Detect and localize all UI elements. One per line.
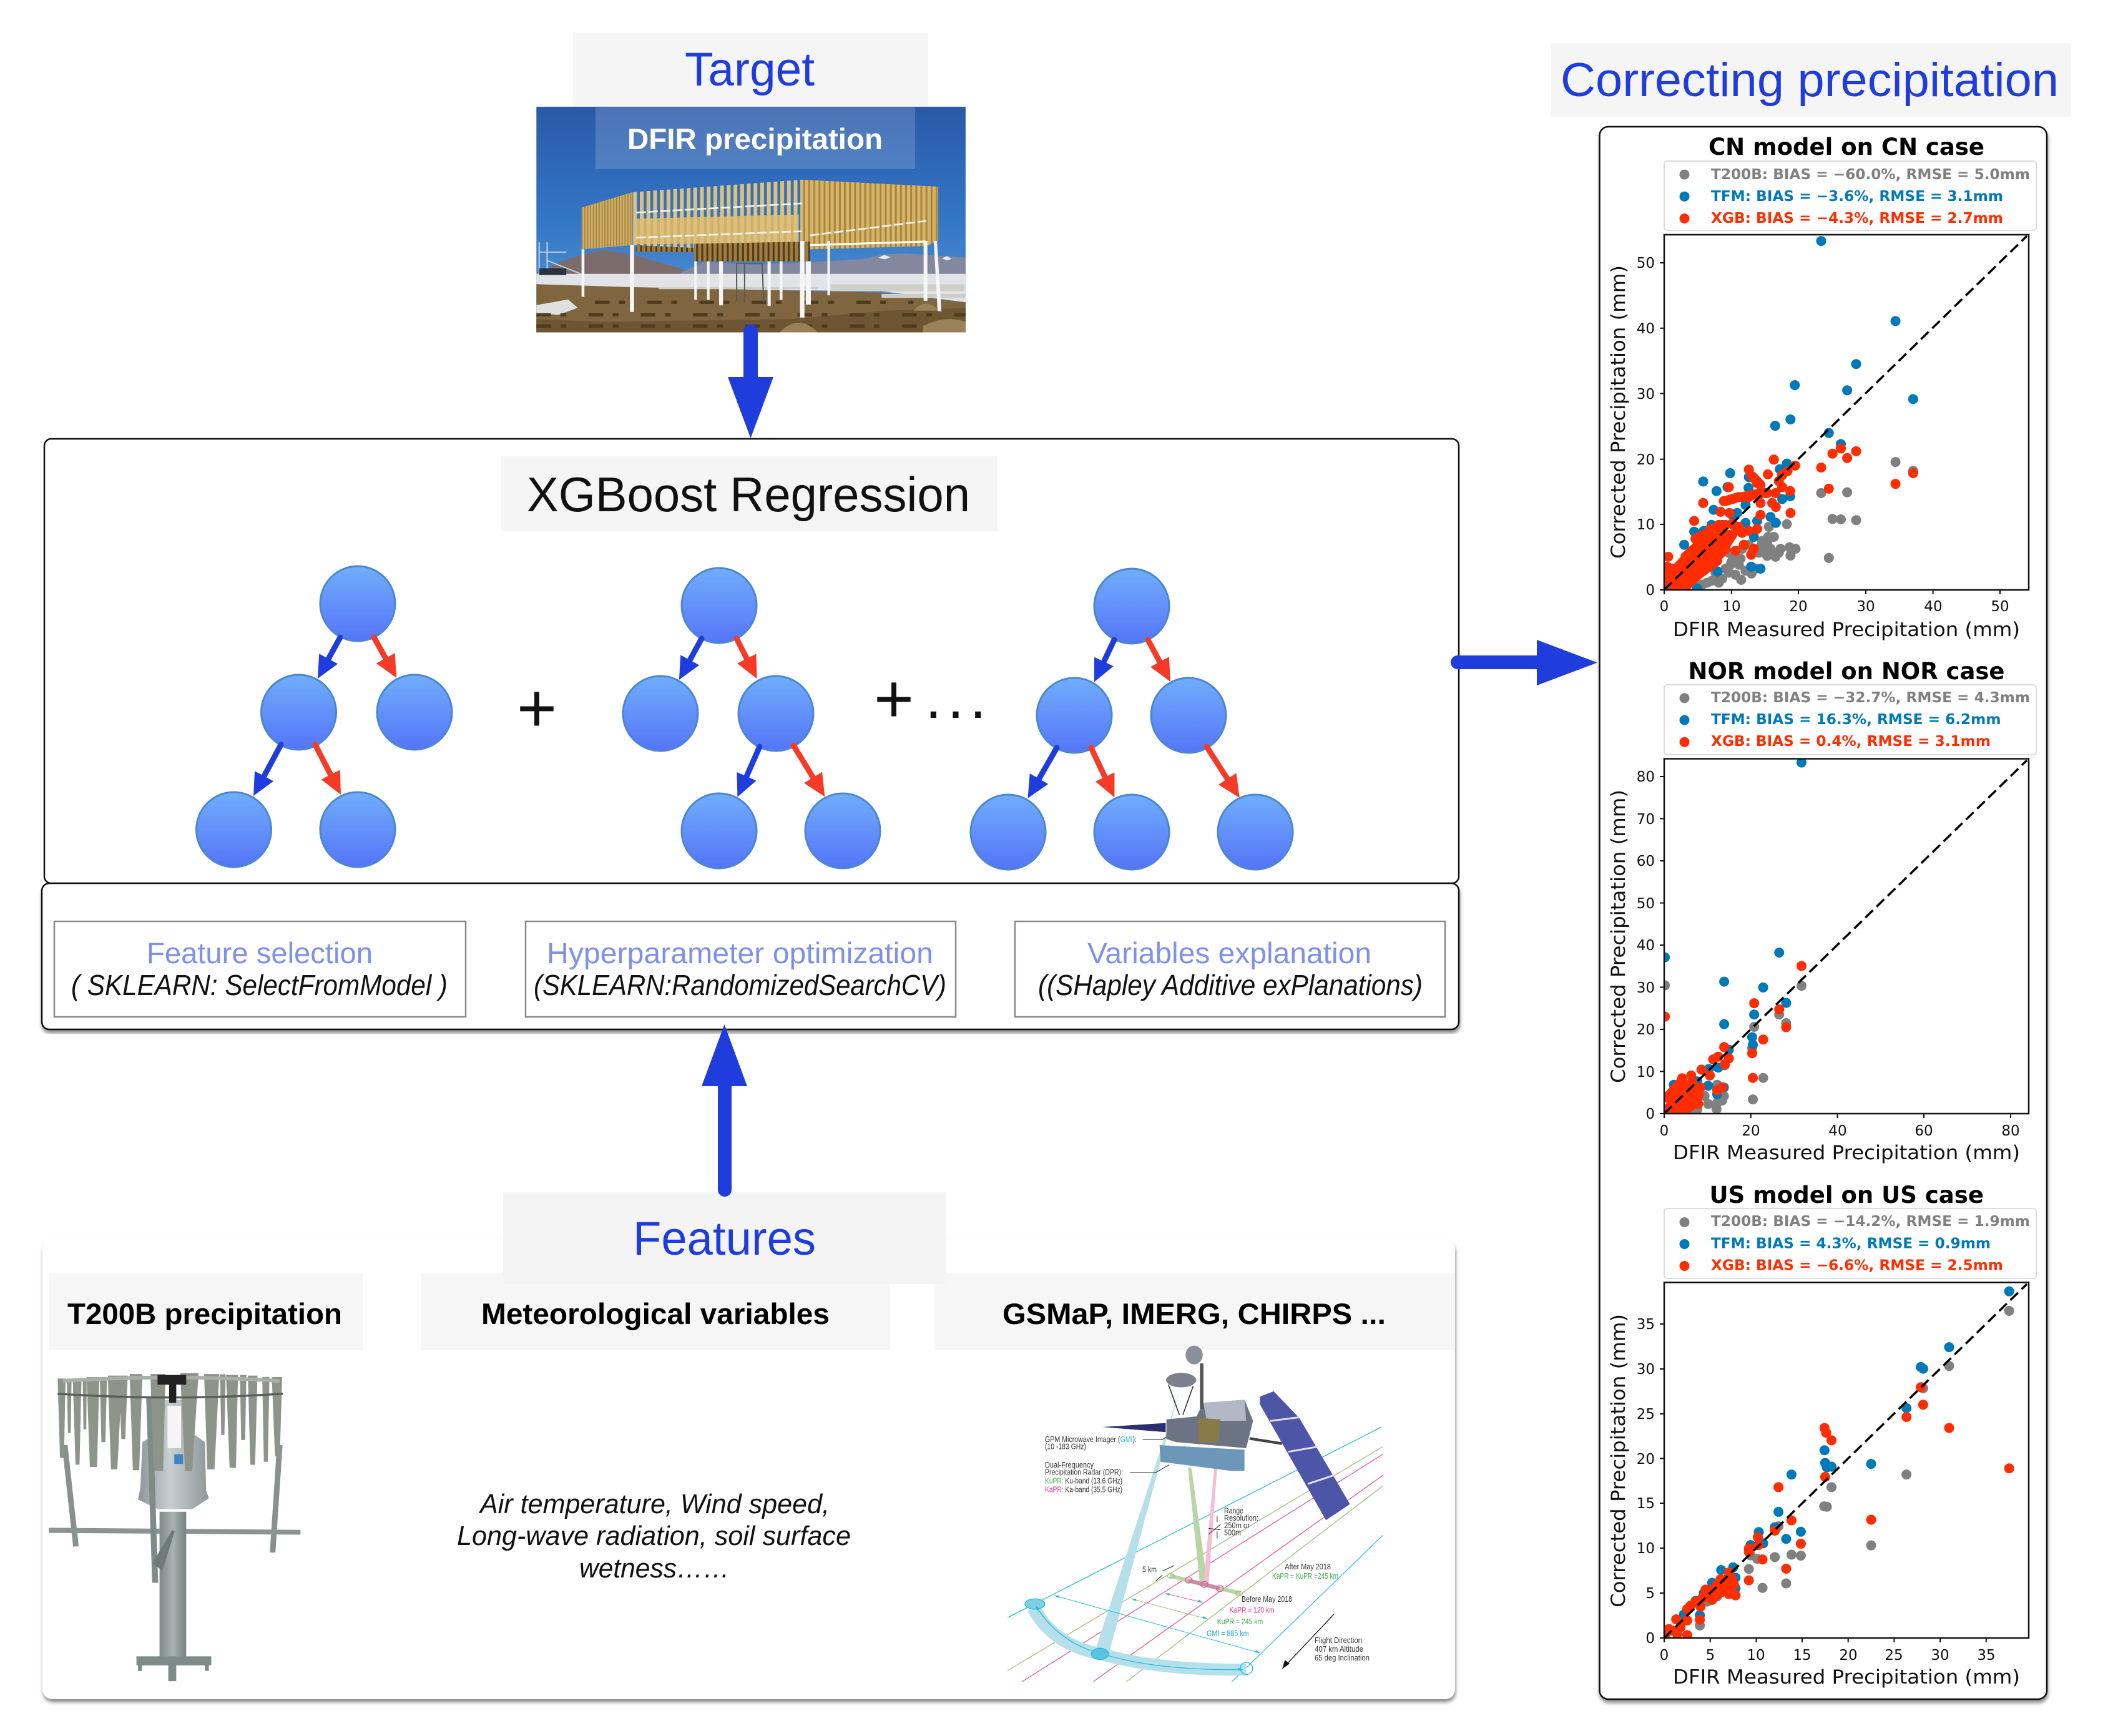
- figure: GPM satellite diagram: KaPR = 120 km: [1230, 1606, 1275, 1615]
- axes and ticks: 40: [1828, 1123, 1847, 1139]
- box: variables explanation: Variables explanation: [1087, 936, 1371, 969]
- scatter points: [1665, 1292, 2009, 1635]
- figure: GPM satellite diagram: 5 km: [1142, 1566, 1157, 1574]
- arrow: target to XGBoost: [728, 325, 773, 438]
- legend: [1664, 685, 2036, 755]
- axes and ticks: 40: [1637, 321, 1655, 337]
- axes and ticks: 20: [1789, 599, 1808, 615]
- axes and ticks: 10: [1722, 599, 1741, 615]
- chart title: US model on US case: [1709, 1182, 1984, 1209]
- figure: GPM satellite diagram: KuPR: Ku-band (13.6 GHz): [1045, 1477, 1122, 1486]
- legend: XGB: BIAS = −4.3%, RMSE = 2.7mm: [1711, 210, 2003, 227]
- figure: GPM satellite diagram: (10 -183 GHz): [1045, 1442, 1086, 1451]
- label band: DFIR precipitation: DFIR precipitation: [627, 122, 883, 155]
- heading: Correcting precipitation: Correcting precipitation: [1561, 54, 2059, 107]
- axes and ticks: 0: [1660, 1123, 1669, 1139]
- text: meteorological variable list: Air temperature, Wind speed,: [478, 1489, 830, 1519]
- axes and ticks: 0: [1660, 599, 1669, 615]
- plus and ellipsis: +: [874, 660, 914, 737]
- axes and ticks: 30: [1931, 1647, 1949, 1664]
- axes and ticks: 30: [1637, 386, 1655, 403]
- legend: T200B: BIAS = −14.2%, RMSE = 1.9mm: [1711, 1214, 2030, 1230]
- legend: XGB: BIAS = −6.6%, RMSE = 2.5mm: [1711, 1258, 2003, 1274]
- panel: target: [536, 32, 966, 332]
- box: GSMaP, IMERG, CHIRPS: GSMaP, IMERG, CHIRPS ...: [1003, 1297, 1386, 1330]
- axes and ticks: 60: [1637, 853, 1655, 870]
- axes and ticks: 50: [1637, 896, 1655, 912]
- axes and ticks: 35: [1637, 1317, 1655, 1333]
- axes and ticks: [1637, 759, 2029, 1139]
- arrow: features to model: [702, 1024, 747, 1197]
- axes and ticks: 25: [1885, 1647, 1903, 1664]
- scatter points: [1665, 763, 1802, 1112]
- heading: Target: Target: [685, 43, 815, 96]
- figure: GPM satellite diagram: 407 km Altitude: [1315, 1645, 1363, 1654]
- chart title: NOR model on NOR case: [1688, 658, 2005, 685]
- figure: GPM satellite diagram: 65 deg Inclination: [1315, 1654, 1370, 1662]
- tree 1: [196, 566, 452, 867]
- text: meteorological variable list: Long-wave radiation, soil surface: [457, 1521, 851, 1551]
- figure: GPM satellite diagram: GPM Microwave Imager (GMI):: [1045, 1435, 1137, 1444]
- box: feature selection: ( SKLEARN: SelectFromModel ): [71, 969, 448, 1001]
- arrow: model to corrected output: [1451, 640, 1597, 685]
- chart title: CN model on CN case: [1708, 134, 1984, 160]
- box: hyperparameter optimization: (SKLEARN:RandomizedSearchCV): [534, 969, 946, 1001]
- box: feature selection: [54, 921, 466, 1017]
- figure: GPM satellite diagram: Flight Direction: [1315, 1636, 1362, 1645]
- panel: features: [42, 1192, 1455, 1699]
- box: GSMaP, IMERG, CHIRPS: [934, 1273, 1455, 1350]
- axes and ticks: 0: [1660, 1647, 1669, 1664]
- chart: US model on US case: [1607, 1182, 2036, 1689]
- y axis label: Corrected Precipitation (mm): [1607, 1314, 1630, 1607]
- box: variables explanation: ((SHapley Additive exPlanations): [1038, 969, 1423, 1001]
- figure: GPM satellite diagram: [1007, 1346, 1383, 1682]
- panel: tuning tools: [42, 883, 1459, 1029]
- legend: [1664, 161, 2036, 230]
- axes and ticks: 80: [2001, 1123, 2020, 1139]
- axes and ticks: 35: [1977, 1647, 1996, 1664]
- axes and ticks: 40: [1924, 599, 1943, 615]
- x axis label: DFIR Measured Precipitation (mm): [1673, 1666, 2020, 1689]
- axes and ticks: 80: [1637, 769, 1655, 785]
- legend: T200B: BIAS = −60.0%, RMSE = 5.0mm: [1711, 167, 2030, 183]
- axes and ticks: 5: [1645, 1586, 1655, 1602]
- axes and ticks: 15: [1637, 1496, 1655, 1512]
- axes and ticks: 50: [1991, 599, 2009, 615]
- figure: GPM satellite diagram: Precipitation Radar (DPR):: [1045, 1468, 1123, 1477]
- axes and ticks: 0: [1645, 1631, 1655, 1647]
- box: meteorological variables: Meteorological variables: [481, 1297, 830, 1330]
- axes and ticks: 5: [1706, 1647, 1715, 1664]
- axes and ticks: 20: [1637, 452, 1655, 468]
- axes and ticks: 25: [1637, 1406, 1655, 1423]
- tree 2: [623, 568, 880, 868]
- heading: Target: [573, 32, 928, 107]
- figure: GPM satellite diagram: Range: [1224, 1507, 1243, 1516]
- axes and ticks: 10: [1637, 517, 1655, 533]
- heading: XGBoost Regression: [501, 456, 998, 531]
- panel: correction results: [1599, 127, 2047, 1699]
- legend: TFM: BIAS = −3.6%, RMSE = 3.1mm: [1711, 189, 2003, 205]
- heading: Features: Features: [633, 1212, 816, 1265]
- axes and ticks: 50: [1637, 255, 1655, 272]
- figure: GPM satellite diagram: 500m: [1224, 1528, 1241, 1537]
- axes and ticks: 20: [1839, 1647, 1858, 1664]
- axes and ticks: 70: [1637, 812, 1655, 828]
- axes and ticks: [1637, 1282, 2029, 1664]
- axes and ticks: 10: [1747, 1647, 1765, 1664]
- axes and ticks: 15: [1793, 1647, 1811, 1664]
- legend: TFM: BIAS = 4.3%, RMSE = 0.9mm: [1711, 1236, 1991, 1252]
- icon: T200B gauge: [49, 1373, 300, 1681]
- panel: XGBoost Regression: [44, 439, 1459, 883]
- legend: XGB: BIAS = 0.4%, RMSE = 3.1mm: [1711, 733, 1991, 750]
- plus sign: +: [517, 670, 557, 747]
- photo: DFIR wooden fence: [536, 107, 966, 332]
- box: hyperparameter optimization: [526, 921, 956, 1017]
- axes and ticks: 10: [1637, 1541, 1655, 1557]
- label band: DFIR precipitation: [596, 107, 915, 169]
- y axis label: Corrected Precipitation (mm): [1607, 790, 1630, 1083]
- text: meteorological variable list: [457, 1489, 851, 1584]
- axes and ticks: 30: [1637, 1361, 1655, 1378]
- chart: CN model on CN case: [1607, 134, 2036, 641]
- heading: XGBoost Regression: XGBoost Regression: [527, 467, 970, 522]
- axes and ticks: [1637, 235, 2029, 615]
- figure: GPM satellite diagram: After May 2018: [1285, 1562, 1331, 1571]
- text: meteorological variable list: wetness……: [579, 1553, 730, 1584]
- axes and ticks: 0: [1645, 1106, 1655, 1122]
- plus and ellipsis: ...: [925, 664, 986, 731]
- figure: GPM satellite diagram: Resolution:: [1224, 1514, 1258, 1523]
- figure: GPM satellite diagram: KaPR: Ka-band (35.5 GHz): [1045, 1486, 1122, 1494]
- chart: NOR model on NOR case: [1607, 658, 2036, 1164]
- axes and ticks: 20: [1637, 1022, 1655, 1038]
- tree 3: [971, 569, 1293, 870]
- axes and ticks: 30: [1637, 980, 1655, 996]
- legend: TFM: BIAS = 16.3%, RMSE = 6.2mm: [1711, 712, 2001, 728]
- x axis label: DFIR Measured Precipitation (mm): [1673, 1142, 2020, 1164]
- plus and ellipsis: [874, 660, 986, 737]
- figure: GPM satellite diagram: GMI = 885 km: [1207, 1629, 1248, 1638]
- figure: GPM satellite diagram: Dual-Frequency: [1045, 1461, 1094, 1469]
- box: T200B precipitation: [49, 1273, 363, 1350]
- box: hyperparameter optimization: Hyperparameter optimization: [547, 936, 933, 969]
- axes and ticks: 60: [1914, 1123, 1933, 1139]
- figure: GPM satellite diagram: 250m or: [1224, 1521, 1250, 1530]
- axes and ticks: 10: [1637, 1064, 1655, 1081]
- axes and ticks: 30: [1856, 599, 1875, 615]
- heading: Features: [503, 1192, 946, 1284]
- figure: GPM satellite diagram: Before May 2018: [1242, 1595, 1292, 1604]
- axes and ticks: 20: [1742, 1123, 1760, 1139]
- y axis label: Corrected Precipitation (mm): [1607, 265, 1630, 559]
- heading: Correcting precipitation: [1551, 43, 2071, 117]
- figure: GPM satellite diagram: KaPR = KuPR =245 km: [1272, 1572, 1338, 1581]
- legend: T200B: BIAS = −32.7%, RMSE = 4.3mm: [1711, 690, 2030, 706]
- box: feature selection: Feature selection: [147, 936, 373, 969]
- x axis label: DFIR Measured Precipitation (mm): [1673, 619, 2020, 641]
- box: T200B precipitation: T200B precipitation: [67, 1297, 342, 1330]
- box: meteorological variables: [421, 1273, 890, 1350]
- box: variables explanation: [1015, 921, 1445, 1017]
- axes and ticks: 40: [1637, 938, 1655, 954]
- scatter points: [1667, 241, 1913, 589]
- axes and ticks: 20: [1637, 1451, 1655, 1468]
- legend: [1664, 1209, 2036, 1278]
- axes and ticks: 0: [1645, 582, 1655, 599]
- figure: GPM satellite diagram: KuPR = 245 km: [1217, 1617, 1263, 1626]
